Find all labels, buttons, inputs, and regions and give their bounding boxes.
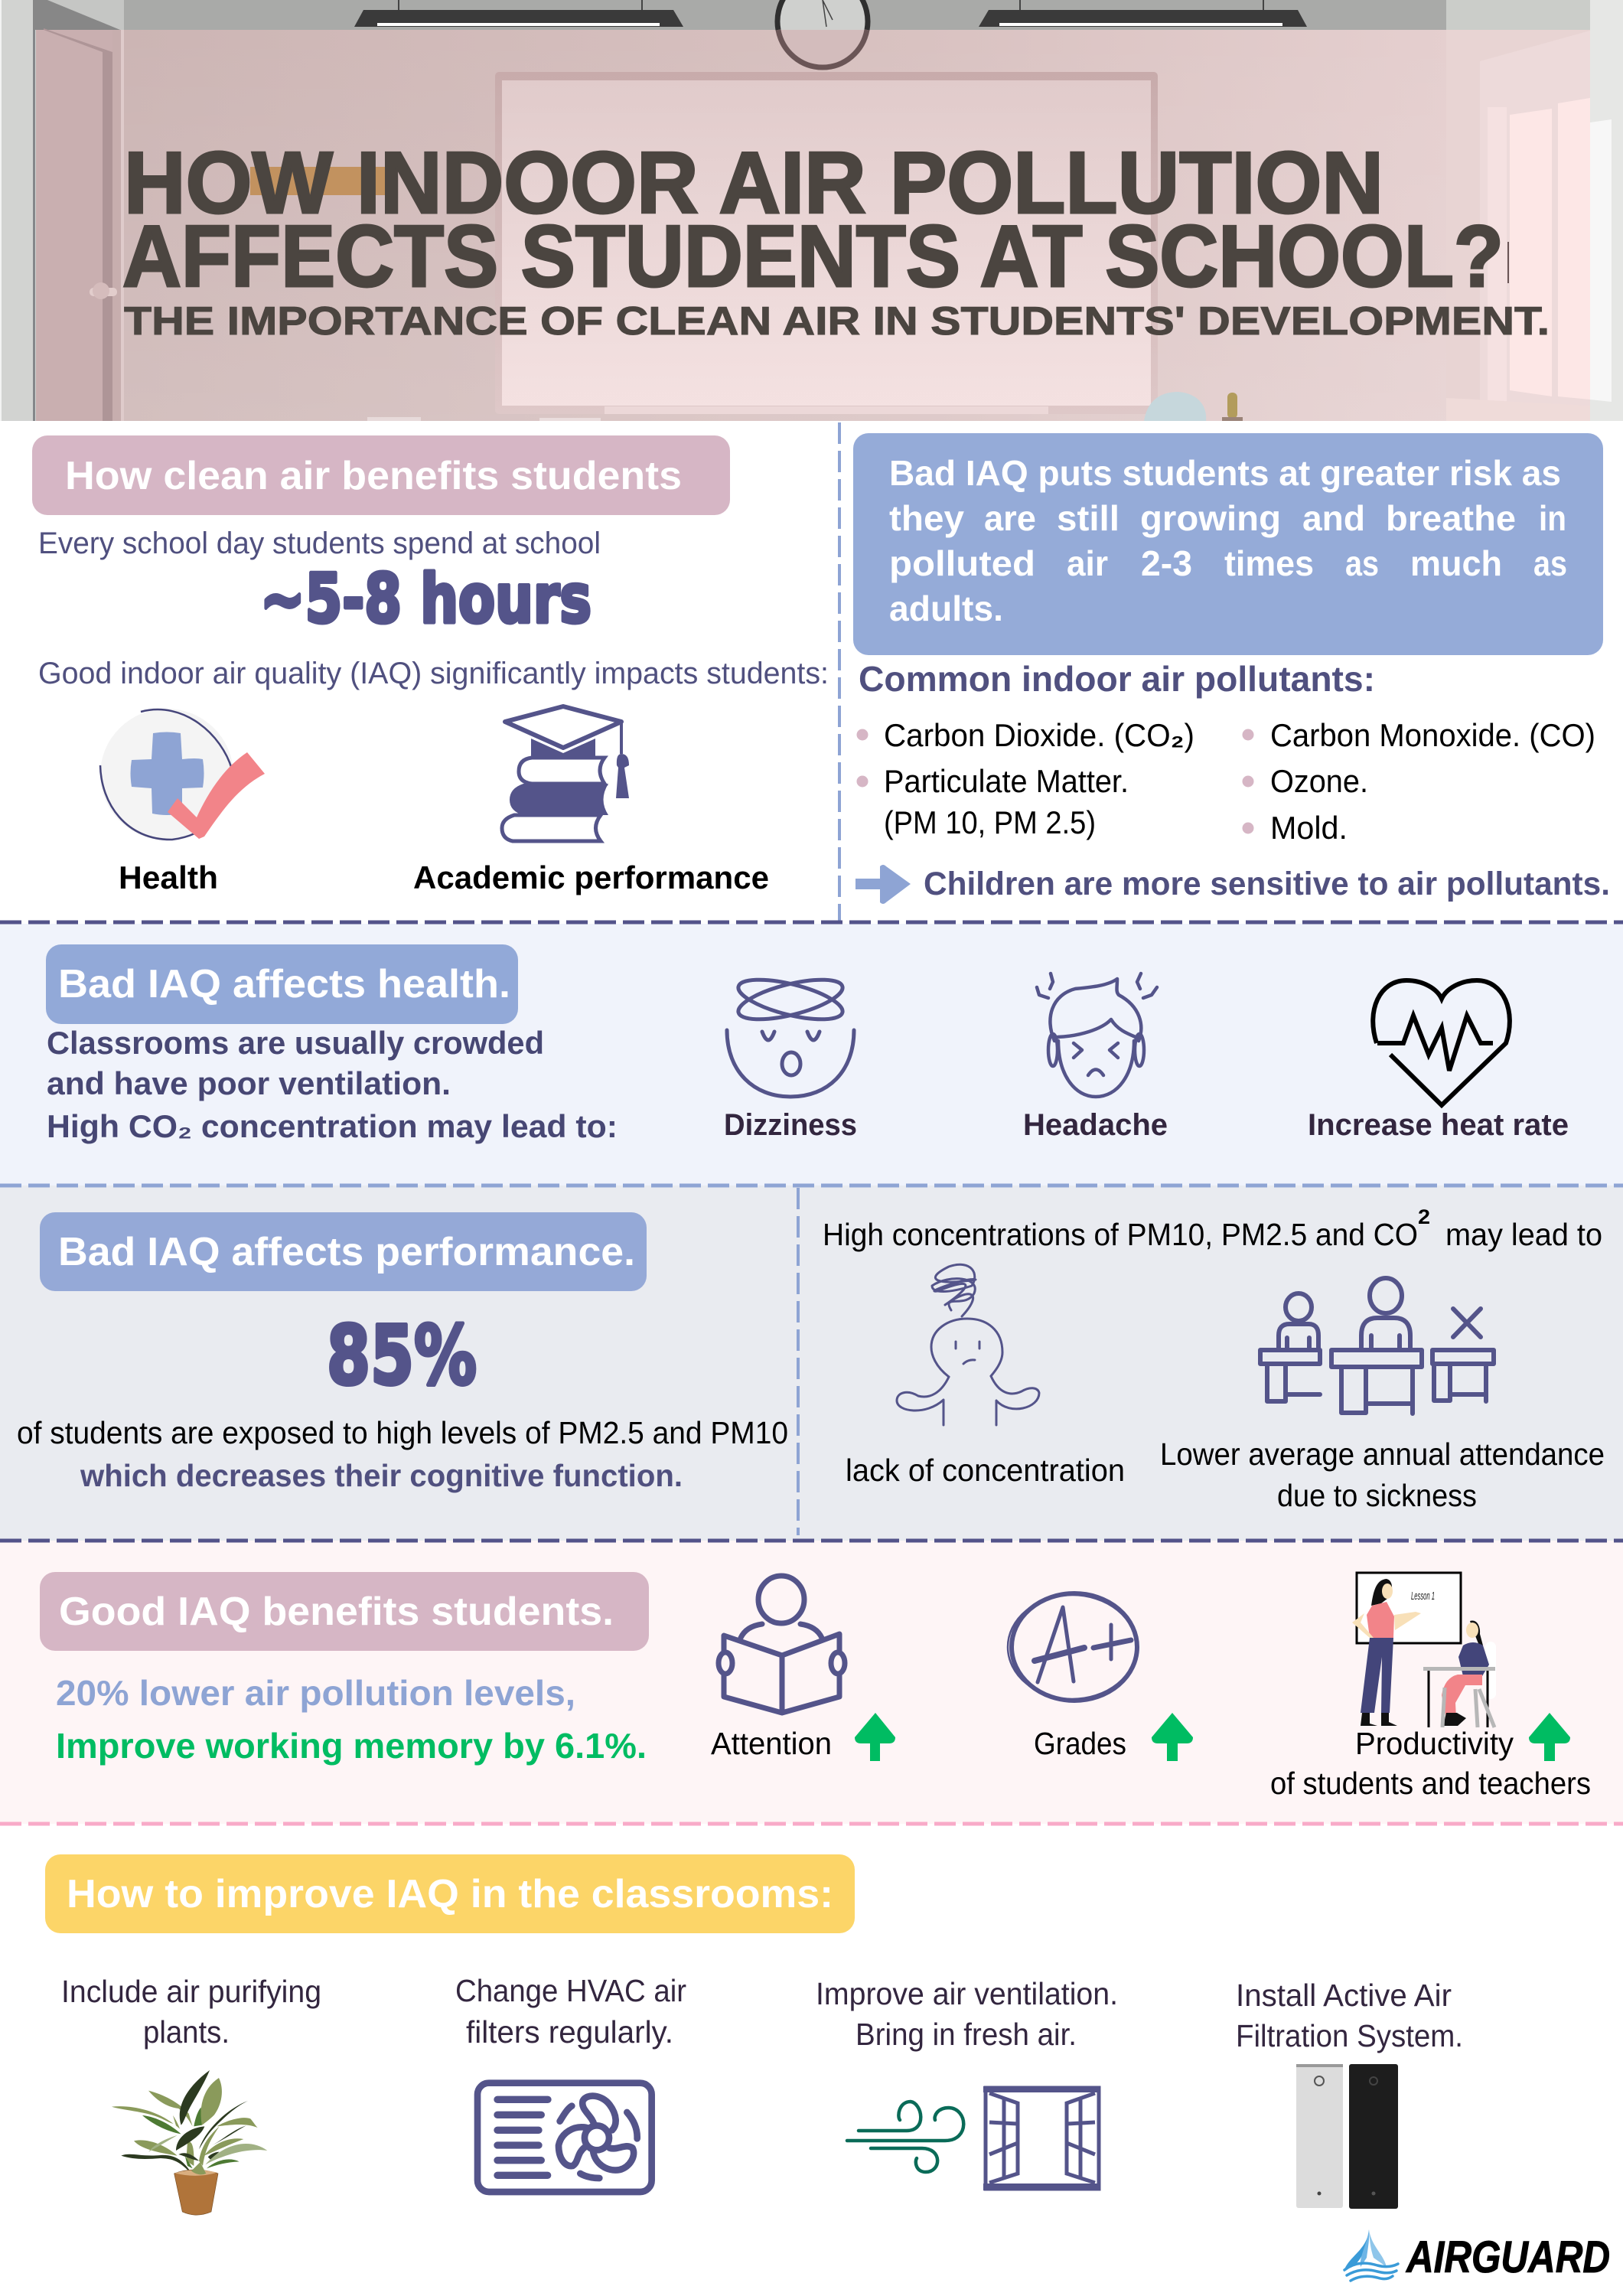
text: high concentrations: High concentrations of PM10, PM2.5 and CO (823, 1217, 1418, 1252)
text: high concentrations (823, 1205, 1602, 1252)
arrow: attention up (855, 1713, 895, 1761)
label: dizziness: Dizziness (724, 1108, 857, 1142)
risk callout: as (1345, 543, 1379, 583)
text: good IAQ: Good indoor air quality (IAQ) significantly impacts students: (38, 657, 829, 690)
stat: hours: ~5-8 hours (260, 559, 592, 638)
icon: wind (847, 2102, 963, 2172)
title: HOW INDOOR AIR POLLUTION (124, 135, 1383, 232)
window (1480, 31, 1590, 421)
pollutant list: (PM 10, PM 2.5) (884, 804, 1096, 840)
icon: person reading (719, 1576, 845, 1713)
arrow: productivity up (1529, 1713, 1570, 1761)
text: classrooms crowded: and have poor ventilation. (47, 1065, 451, 1101)
heading pill: Good IAQ benefits students. (59, 1590, 614, 1634)
heading pill (46, 944, 518, 1024)
heading pill: How to improve IAQ in the classrooms: (67, 1872, 833, 1916)
heading pill: Bad IAQ affects performance. (58, 1230, 635, 1274)
section backgrounds (0, 924, 1623, 1824)
tip: active air filtration: Install Active Air (1236, 1978, 1452, 2013)
text: lower pollution: 20% lower air pollution levels, (56, 1673, 575, 1713)
ceiling lights (354, 10, 683, 27)
title: AFFECTS STUDENTS AT SCHOOL? (122, 208, 1504, 305)
panel: good IAQ benefits students (40, 1572, 1591, 1801)
text: classrooms crowded: High CO₂ concentration may lead to: (47, 1108, 618, 1144)
pollutant list: Mold. (1270, 810, 1348, 846)
text: classrooms crowded (47, 1025, 618, 1144)
tip: ventilation: Bring in fresh air. (855, 2017, 1077, 2052)
tip: active air filtration: Filtration System. (1236, 2018, 1463, 2053)
pollutant list: Carbon Monoxide. (CO) (1270, 717, 1595, 753)
icon: heart rate (1373, 980, 1510, 1105)
label: lower attendance: due to sickness (1277, 1478, 1477, 1513)
text: cognitive function: which decreases their cognitive function. (80, 1458, 683, 1493)
tip: plants: plants. (143, 2014, 230, 2050)
text: classrooms crowded: Classrooms are usually crowded (47, 1025, 544, 1061)
icon: health (100, 709, 265, 840)
risk callout: they (889, 498, 964, 538)
label: lower attendance: Lower average annual attendance (1160, 1437, 1605, 1472)
risk callout: are (984, 498, 1036, 538)
tip: ventilation: Improve air ventilation. (816, 1976, 1118, 2011)
icon: potted plant (112, 2070, 267, 2215)
label: academic performance: Academic performance (413, 859, 769, 895)
icon: open window (983, 2086, 1100, 2190)
tip: HVAC filters (455, 1973, 686, 2050)
dividers (0, 422, 1623, 1824)
pollutant list (857, 717, 1595, 846)
icon: dizziness (727, 972, 854, 1097)
risk callout: adults. (889, 589, 1003, 628)
heading pill: How clean air benefits students (65, 454, 682, 498)
risk callout: 2-3 (1141, 543, 1192, 583)
text: students exposed: of students are exposed to high levels of PM2.5 and PM10 (17, 1415, 788, 1450)
pollutant list: Particulate Matter. (884, 763, 1129, 799)
ceiling (35, 0, 124, 30)
label: grades: Grades (1034, 1726, 1126, 1761)
label: increase heat rate: Increase heat rate (1308, 1108, 1569, 1142)
tip: plants (61, 1974, 321, 2050)
risk callout: growing (1140, 498, 1281, 538)
risk callout: still (1057, 498, 1119, 538)
icon: graduation cap and books (502, 706, 629, 841)
heading pill (45, 1854, 855, 1933)
text: working memory: Improve working memory by 6.1%. (56, 1726, 647, 1766)
tip: active air filtration (1236, 1978, 1463, 2053)
icon: air purifiers (1296, 2064, 1398, 2209)
risk callout: air (1067, 543, 1108, 583)
panel: header classroom photo (0, 0, 1623, 421)
icon: confused person (897, 1264, 1039, 1425)
label: productivity: Productivity (1355, 1726, 1514, 1761)
heading pill (40, 1572, 649, 1651)
label: students and teachers: of students and teachers (1270, 1766, 1591, 1801)
heading pill (32, 435, 730, 515)
tip: HVAC filters: filters regularly. (466, 2014, 673, 2050)
panel: bad IAQ affects health (46, 944, 1569, 1144)
risk callout: much (1410, 543, 1502, 583)
heading: common pollutants: Common indoor air pollutants: (859, 659, 1375, 699)
pollutant list: Ozone. (1270, 763, 1368, 799)
icon: teacher and student: Lesson 1 (1411, 1590, 1435, 1603)
label: health: Health (119, 859, 218, 895)
panel: how to improve IAQ (45, 1854, 1610, 2282)
clock (777, 0, 868, 30)
icon: HVAC unit (477, 2083, 652, 2192)
risk callout: and (1302, 498, 1365, 538)
risk callout: times (1224, 543, 1314, 583)
arrow: grades up (1152, 1713, 1193, 1761)
text: children sensitive: Children are more sensitive to air pollutants. (924, 866, 1610, 902)
stat: 85 percent: 85% (327, 1309, 477, 1403)
pollutant list: Carbon Dioxide. (CO₂) (884, 717, 1194, 753)
text: school day: Every school day students spend at school (38, 527, 601, 560)
tip: ventilation (816, 1976, 1118, 2052)
label: headache: Headache (1023, 1108, 1168, 1142)
label: lack of concentration: lack of concentration (846, 1453, 1125, 1488)
chair and cactus (1144, 392, 1206, 421)
logo: Airguard (1344, 2229, 1610, 2282)
door (36, 30, 124, 421)
arrow (855, 865, 911, 904)
panel: how clean air benefits students (32, 435, 829, 895)
risk callout: as (1533, 543, 1567, 583)
icon: classroom desks (1260, 1278, 1494, 1414)
icon: teacher and student (1352, 1573, 1496, 1727)
heading pill: Bad IAQ affects health. (58, 962, 510, 1006)
icon: A plus grade (1008, 1593, 1137, 1701)
label: attention: Attention (711, 1726, 832, 1761)
icon: headache (1037, 974, 1157, 1097)
risk callout: polluted (889, 543, 1035, 583)
whiteboard (495, 72, 1158, 414)
subtitle: THE IMPORTANCE OF CLEAN AIR IN STUDENTS' DEVELOPMENT. (124, 299, 1550, 344)
risk callout: Bad IAQ puts students at greater risk as (889, 453, 1561, 493)
wood coat rack (250, 167, 394, 195)
text: high concentrations: 2 (1418, 1205, 1430, 1228)
panel: bad IAQ affects performance (17, 1205, 1605, 1513)
heading pill (40, 1212, 647, 1291)
text: high concentrations: may lead to (1445, 1217, 1602, 1252)
label: lower attendance (1160, 1437, 1605, 1513)
risk callout: in (1539, 498, 1566, 538)
risk callout (853, 433, 1603, 655)
tip: HVAC filters: Change HVAC air (455, 1973, 686, 2008)
wall (36, 30, 1590, 421)
panel: children at greater risk (853, 433, 1610, 904)
tip: plants: Include air purifying (61, 1974, 321, 2009)
risk callout: breathe (1386, 498, 1516, 538)
title (122, 135, 1509, 305)
